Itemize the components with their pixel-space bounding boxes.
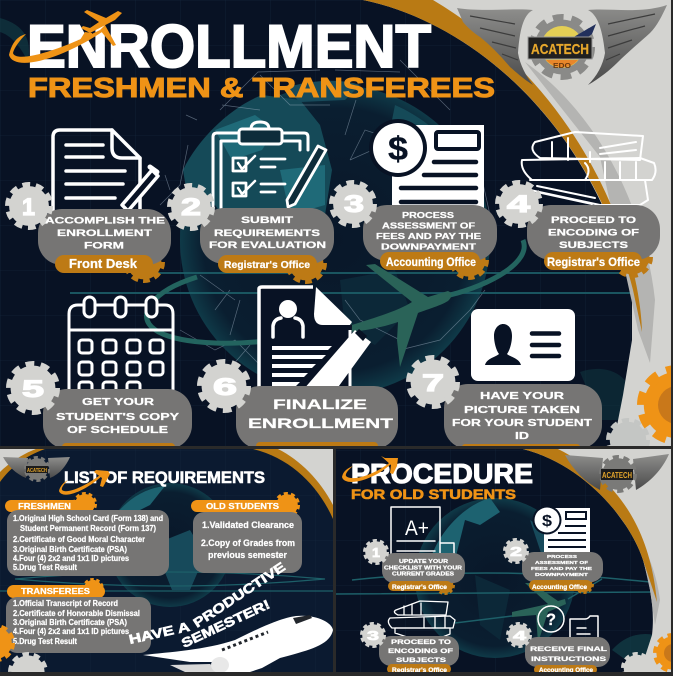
small logo <box>3 457 70 480</box>
step 4 label <box>548 215 639 251</box>
office pill top <box>256 442 378 450</box>
header text: FRESHMEN <box>18 501 71 511</box>
list box <box>193 512 302 573</box>
office pill <box>218 255 317 273</box>
pencil <box>303 330 371 390</box>
icon: orange plane and swoosh <box>9 10 122 63</box>
office gear <box>452 243 486 277</box>
label: RECEIVE FINAL <box>530 646 607 653</box>
header gear <box>75 494 95 514</box>
office gear <box>126 260 165 283</box>
orange curved band <box>363 0 642 332</box>
decorative grey gear <box>623 654 651 676</box>
small navy plane <box>574 24 596 36</box>
orbit ring <box>146 240 524 343</box>
right corner grey shape <box>363 0 671 446</box>
list text <box>13 514 163 572</box>
darker grey sweep <box>600 490 660 625</box>
question mark: ? <box>546 610 556 629</box>
step 7 label: PICTURE TAKEN <box>464 405 580 416</box>
office label: Registrar's Office <box>224 259 310 271</box>
step 5 <box>10 297 192 451</box>
step 1 label: FORM <box>84 240 124 252</box>
gear <box>508 624 530 646</box>
gear 3 <box>332 183 374 225</box>
step 2 label <box>209 215 326 251</box>
globe <box>415 498 575 658</box>
header text: TRANSFEREES <box>21 586 90 596</box>
step 6 label: FINALIZE <box>273 396 367 412</box>
label: PROCEED TO <box>391 639 451 646</box>
step 4 <box>498 132 660 275</box>
step 7 label: FOR YOUR STUDENT <box>452 418 592 429</box>
top-right corner <box>275 449 333 510</box>
globe <box>180 81 490 395</box>
step 3 label: DOWNPAYMENT <box>381 242 476 252</box>
step 1 label <box>45 216 165 249</box>
number: 3 <box>367 628 379 643</box>
left wing <box>457 8 533 85</box>
gear 6 <box>201 363 247 409</box>
dotted mesh <box>612 634 655 670</box>
step 4 pill <box>527 205 660 260</box>
number: 2 <box>510 544 522 559</box>
label: ENCODING OF <box>388 648 453 655</box>
subtitle: FOR OLD STUDENTS <box>351 486 516 502</box>
list text: 1.Official Transcript of Record <box>13 599 118 608</box>
list text: 4.Four (4) 2x2 and 1x1 ID pictures <box>13 627 129 636</box>
gear 2 <box>170 186 212 228</box>
label: UPDATE YOUR <box>399 559 448 565</box>
number: 4 <box>513 628 527 643</box>
title: PROCEDURE <box>351 458 533 489</box>
step 6 label <box>248 396 394 431</box>
office pill top <box>62 443 175 451</box>
gear hub <box>664 644 673 662</box>
office label: Accounting Office <box>386 257 476 269</box>
list text: 2.Certificate of Honorable Dismissal <box>13 609 140 618</box>
header pill <box>5 500 93 512</box>
step 1 label: ACCOMPLISH THE <box>45 216 166 226</box>
office label: Registrar's Office <box>392 585 448 591</box>
icon: form document <box>53 130 158 211</box>
label: DOWNPAYMENT <box>535 572 588 577</box>
label: INSTRUCTIONS <box>531 656 607 663</box>
icon: books <box>522 132 656 205</box>
closing message: SEMESTER! <box>179 597 272 651</box>
step 2 label: SUBMIT <box>241 215 293 226</box>
logo text: ACATECH <box>602 471 632 480</box>
right dotted mesh <box>580 369 628 420</box>
globe <box>108 483 232 607</box>
icon: student record <box>259 287 371 390</box>
list text: 3.Original Birth Certificate (PSA) <box>13 618 127 627</box>
icon: orange plane swoosh <box>59 470 110 495</box>
subtitle: FRESHMEN & TRANSFEREES <box>28 72 495 103</box>
top-left orange arc <box>0 449 45 482</box>
office label: Accounting Office <box>539 668 594 674</box>
list text: Student Permanent Record (Form 137) <box>20 524 156 533</box>
step 3 pill <box>363 205 497 261</box>
step 2 pill <box>200 208 334 264</box>
office gear <box>575 575 593 593</box>
step 3 label <box>376 211 481 252</box>
label: SUBJECTS <box>396 657 447 664</box>
number 7: 7 <box>422 370 444 397</box>
list box <box>6 597 151 653</box>
number 4: 4 <box>507 191 531 218</box>
top-left corner <box>0 449 36 478</box>
gear emblem <box>534 19 590 75</box>
corner grey shape <box>523 449 671 672</box>
icon: ID card <box>471 309 575 381</box>
step 4 label: ENCODING OF <box>548 228 639 238</box>
airplane illustration <box>143 615 333 673</box>
decorative orange gear <box>656 636 673 670</box>
left wing feathers <box>470 16 518 60</box>
pill <box>525 637 610 667</box>
number 1: 1 <box>22 194 35 221</box>
pill <box>382 553 465 583</box>
gear hub <box>658 386 673 424</box>
closing message: PRODUCTIVE <box>190 559 288 631</box>
step 4 label: SUBJECTS <box>559 240 629 251</box>
step 2 label: REQUIREMENTS <box>214 228 321 239</box>
list text: 1.Validated Clearance <box>202 520 294 530</box>
gear <box>365 541 387 563</box>
panel: enrollment freshmen and transferees <box>0 0 673 459</box>
right wing feathers <box>606 14 655 60</box>
icon: calendar <box>69 297 173 395</box>
step 1 <box>8 130 171 280</box>
step 3 label: PROCESS <box>402 211 454 220</box>
old step 3 <box>362 601 459 674</box>
office pill <box>544 252 642 270</box>
office pill <box>534 665 597 674</box>
pill <box>379 636 459 666</box>
step 5 label <box>56 397 179 436</box>
icon: question and document <box>538 606 598 640</box>
number 5: 5 <box>22 376 44 403</box>
decorative orange gear <box>643 371 673 439</box>
decorative grey gear <box>11 655 45 676</box>
list text <box>201 520 295 560</box>
panel: procedure for old students <box>336 449 673 676</box>
gear 4 <box>498 183 540 225</box>
step 6 <box>201 287 398 450</box>
office pill <box>55 255 153 273</box>
decorative grey gear <box>609 421 647 459</box>
label: FEES AND PAY THE <box>531 566 592 571</box>
label <box>530 646 607 663</box>
pill <box>522 552 603 582</box>
label: CHECKLIST WITH YOUR <box>384 566 462 572</box>
gear <box>362 624 384 646</box>
plane silhouette <box>345 264 452 367</box>
number 2: 2 <box>181 194 201 221</box>
freshmen section <box>5 494 169 576</box>
office pill <box>529 580 592 591</box>
logo <box>457 5 667 85</box>
teal plane silhouette <box>512 583 566 643</box>
header gear <box>276 494 298 516</box>
office label: Registrar's Office <box>547 257 640 269</box>
icon: books <box>388 601 455 638</box>
dollar sign: $ <box>542 513 552 530</box>
icon: orange plane swoosh <box>342 456 398 482</box>
header text: OLD STUDENTS <box>206 501 279 511</box>
step 1 pill <box>38 209 171 265</box>
label: ASSESSMENT OF <box>535 560 588 565</box>
list text: 3.Original Birth Certificate (PSA) <box>13 545 127 554</box>
logo sub text: EDO <box>553 63 572 70</box>
step 7 label: ID <box>515 431 529 442</box>
label <box>388 639 453 664</box>
number 3: 3 <box>344 191 364 218</box>
icon: graded paper <box>391 507 454 556</box>
orange curved band <box>523 449 657 602</box>
label <box>531 554 592 577</box>
step 3 label: FEES AND PAY THE <box>376 232 481 241</box>
step 3 <box>332 119 497 277</box>
label <box>384 559 462 578</box>
logo text: ACATECH <box>27 468 47 474</box>
label: PROCESS <box>547 554 577 559</box>
darker grey sweep <box>525 62 655 363</box>
A plus grade: A+ <box>405 517 429 540</box>
step 5 pill <box>43 389 192 449</box>
list text: 5.Drug Test Result <box>13 563 77 572</box>
top-right orange arc <box>253 449 333 519</box>
step 2 label: FOR EVALUATION <box>209 240 326 251</box>
pencil <box>122 170 158 211</box>
office label: Registrar's Office <box>392 668 448 674</box>
office pill top <box>462 444 580 450</box>
logo text: ACATECH <box>531 41 589 58</box>
header pill <box>7 585 105 598</box>
transferees section <box>6 580 151 653</box>
step 3 label: ASSESSMENT OF <box>382 222 475 230</box>
list text: 2.Copy of Grades from <box>201 538 295 548</box>
office label: Front Desk <box>69 257 137 271</box>
step 7 pill <box>444 384 602 449</box>
list text: 1.Original High School Card (Form 138) and <box>13 514 163 523</box>
office gear <box>436 576 454 594</box>
closing message <box>127 559 288 651</box>
office gear <box>614 239 650 275</box>
gear 7 <box>410 359 456 405</box>
network lines <box>160 60 490 380</box>
horizontal orbit lines <box>70 273 640 293</box>
decorative orange gear <box>0 627 12 659</box>
step 1 label: ENROLLMENT <box>57 228 152 239</box>
list text <box>13 599 140 646</box>
list text: 4.Four (4) 2x2 and 1x1 ID pictures <box>13 554 129 563</box>
office pill <box>387 664 451 674</box>
closing message: HAVE A <box>127 619 192 647</box>
old step 4 <box>508 606 610 674</box>
number 6: 6 <box>213 374 237 401</box>
step 6 pill <box>236 386 398 449</box>
header pill <box>191 500 293 512</box>
old step 1 <box>365 507 465 594</box>
icon: clipboard <box>213 122 326 208</box>
step 7 <box>410 309 602 450</box>
list text: 2.Certificate of Good Moral Character <box>13 535 145 544</box>
top-left dotted wave <box>0 18 29 56</box>
pencil <box>287 146 326 207</box>
gear <box>505 540 527 562</box>
gear 1 <box>8 185 50 227</box>
heading: LIST OF REQUIREMENTS <box>64 468 265 487</box>
step 5 label: STUDENT'S COPY <box>56 412 179 423</box>
number: 1 <box>372 545 380 560</box>
old step 2 <box>505 506 603 593</box>
step 7 label: HAVE YOUR <box>480 391 564 402</box>
step 4 label: PROCEED TO <box>551 215 637 226</box>
step 5 label: GET YOUR <box>82 397 155 408</box>
step 2 <box>170 122 334 281</box>
office label: Accounting Office <box>532 585 588 591</box>
title: ENROLLMENT <box>27 13 431 80</box>
header gear <box>84 580 102 598</box>
dollar sign: $ <box>388 130 408 167</box>
list text: 5.Drug Test Result <box>13 637 77 646</box>
icon: invoice <box>369 119 484 210</box>
label: CURRENT GRADES <box>392 572 455 578</box>
logo <box>565 454 669 490</box>
old students section <box>191 494 302 573</box>
right wing <box>588 5 667 85</box>
gear 5 <box>10 365 56 411</box>
list text: previous semester <box>208 550 287 560</box>
step 7 label <box>452 391 592 442</box>
panel: list of requirements <box>0 449 333 676</box>
orbit lines <box>0 572 333 591</box>
step 5 label: OF SCHEDULE <box>67 425 168 436</box>
step 6 label: ENROLLMENT <box>248 415 394 431</box>
office gear <box>288 258 327 284</box>
office pill <box>380 252 480 270</box>
list box <box>7 510 169 576</box>
office pill <box>388 581 452 591</box>
orbit lines <box>336 573 654 623</box>
